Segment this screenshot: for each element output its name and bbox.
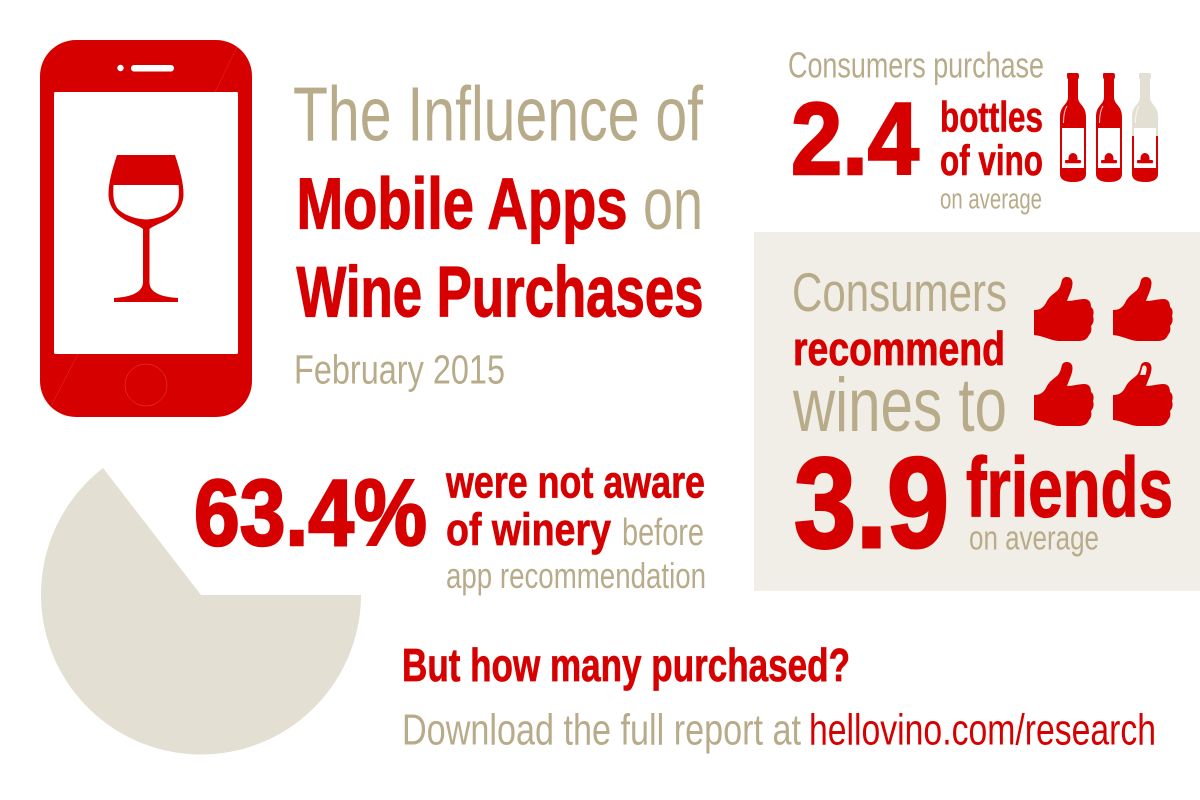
stat: bottles purchased [788, 44, 1044, 216]
panel: recommendations [754, 232, 1200, 591]
stat: not aware of winery: were not aware [445, 456, 705, 508]
text: consumers recommend: Consumers [792, 261, 1007, 323]
icon: smartphone with wine glass [40, 40, 252, 417]
text: consumers recommend: recommend [793, 322, 1005, 375]
date: February 2015 [294, 346, 505, 392]
pie chart [41, 468, 361, 754]
stat: bottles purchased: of vino [940, 137, 1043, 185]
icon: wine glass [108, 155, 184, 302]
title: on [643, 164, 703, 245]
stat: not aware of winery: app recommendation [446, 555, 706, 596]
text: consumers recommend [792, 261, 1007, 448]
stat: bottles purchased: 2.4 [791, 82, 919, 196]
stat: bottles purchased: Consumers purchase [788, 44, 1044, 86]
stat: friends: 3.9 [794, 432, 949, 575]
stat: not aware of winery [194, 456, 706, 596]
icon: wine bottles [1060, 73, 1158, 182]
icon: full bottle 1 [1060, 73, 1086, 182]
call to action: Download the full report at [402, 706, 801, 754]
stat: not aware of winery: 63.4% [194, 460, 427, 565]
stat: bottles purchased: bottles [940, 94, 1043, 142]
icon: full bottle 2 [1096, 73, 1122, 182]
title: Mobile Apps [296, 164, 628, 244]
icon: thumbs up [1034, 277, 1173, 426]
stat: bottles purchased: on average [940, 184, 1042, 216]
stat: not aware of winery: of winery [446, 504, 611, 555]
stat: not aware of winery: before [622, 512, 704, 554]
title: The Influence of [293, 72, 703, 158]
stat: friends [794, 432, 1173, 575]
call to action [402, 639, 1156, 754]
title [293, 72, 704, 332]
title: Wine Purchases [296, 254, 704, 332]
stat: friends: on average [969, 520, 1099, 558]
text: consumers recommend: wines to [792, 363, 1007, 448]
call to action: But how many purchased? [402, 639, 850, 691]
icon: partial bottle [1132, 73, 1158, 182]
